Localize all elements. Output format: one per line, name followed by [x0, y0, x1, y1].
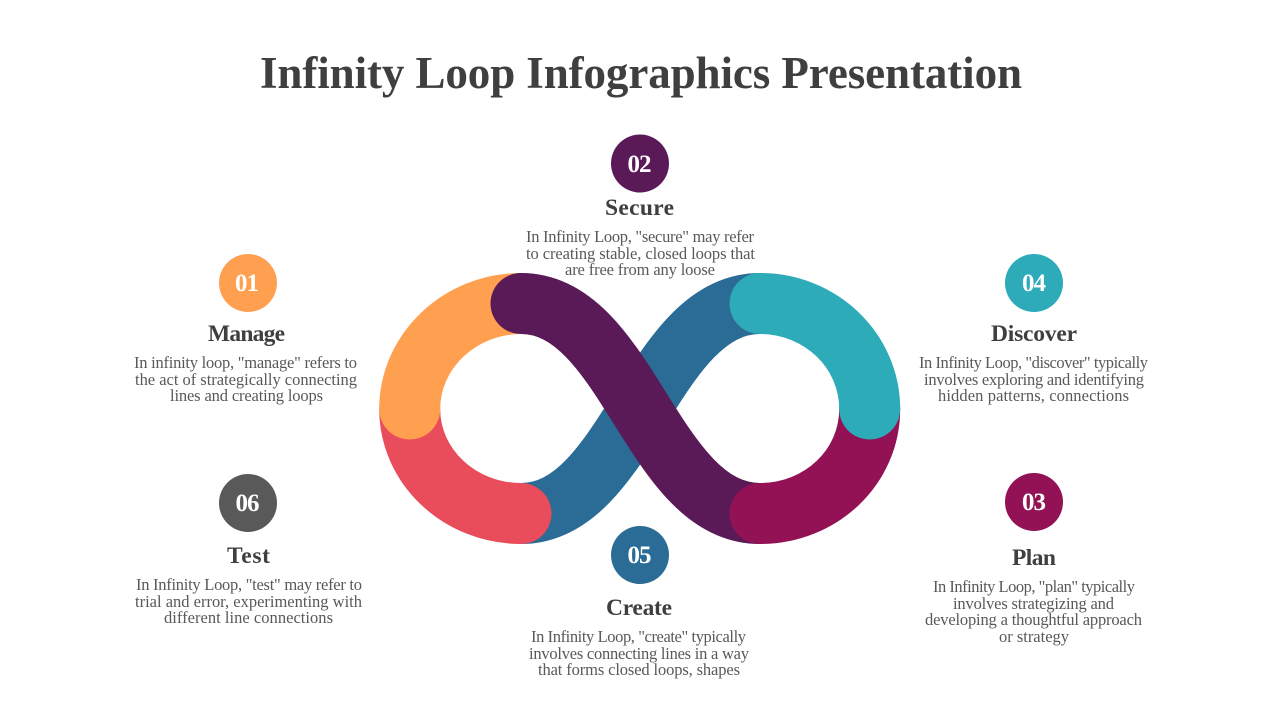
heading: test: Test [227, 543, 270, 569]
text: create description: involves connecting lines in a way [529, 644, 750, 663]
text: discover description: In Infinity Loop, "discover" typically [919, 353, 1149, 372]
text: manage description: the act of strategically connecting [135, 370, 357, 389]
title: Infinity Loop Infographics Presentation [260, 48, 1022, 98]
text: plan description: involves strategizing and [953, 594, 1115, 613]
text: manage description: lines and creating loops [170, 386, 323, 405]
text: create description [529, 627, 750, 679]
badge 06: 06 [236, 490, 260, 517]
heading: discover: Discover [991, 321, 1077, 347]
text: manage description: In infinity loop, "manage" refers to [134, 353, 357, 372]
text: test description [135, 575, 363, 627]
segment: blue create band [521, 304, 760, 514]
text: test description: In Infinity Loop, "test" may refer to [136, 575, 362, 594]
text: secure description [526, 227, 755, 279]
segment: red test arc [410, 409, 521, 514]
heading: manage: Manage [208, 321, 285, 347]
text: secure description: are free from any loose [565, 260, 715, 279]
heading: plan: Plan [1012, 545, 1056, 571]
badge 01 [219, 254, 277, 312]
badge 05 [611, 526, 669, 584]
badge 01: 01 [235, 270, 259, 297]
text: discover description: involves exploring and identifying [924, 370, 1144, 389]
panel: 06 test [135, 474, 363, 627]
badge 03 [1005, 473, 1063, 531]
segment: maroon plan arc [760, 409, 870, 514]
badge 02: 02 [628, 151, 652, 178]
segment: teal discover arc [760, 304, 870, 409]
badge 06 [219, 474, 277, 532]
panel: 05 create [529, 526, 750, 679]
badge 02 [611, 134, 669, 192]
panel: 01 manage [134, 254, 357, 405]
panel: 03 plan [925, 473, 1143, 646]
panel: 02 secure [526, 134, 755, 279]
text: discover description [919, 353, 1149, 405]
text: create description: that forms closed loops, shapes [538, 660, 740, 679]
text: plan description [925, 577, 1143, 646]
badge 05: 05 [628, 542, 652, 569]
text: manage description [134, 353, 357, 405]
text: test description: trial and error, experimenting with [135, 592, 363, 611]
text: plan description: developing a thoughtful approach [925, 610, 1143, 629]
text: secure description: In Infinity Loop, "secure" may refer [526, 227, 754, 246]
segment: purple secure band [521, 304, 760, 514]
text: discover description: hidden patterns, connections [938, 386, 1129, 405]
text: secure description: to creating stable, closed loops that [526, 244, 755, 263]
segment: orange manage arc [410, 304, 521, 409]
infinity loop chart [410, 304, 870, 514]
text: create description: In Infinity Loop, "create" typically [531, 627, 747, 646]
text: plan description: In Infinity Loop, "plan" typically [933, 577, 1136, 596]
heading: secure: Secure [605, 195, 674, 221]
badge 04: 04 [1022, 270, 1046, 297]
badge 04 [1005, 254, 1063, 312]
badge 03: 03 [1022, 489, 1046, 516]
panel: 04 discover [919, 254, 1149, 405]
heading: create: Create [606, 595, 672, 621]
text: plan description: or strategy [999, 627, 1070, 646]
text: test description: different line connections [164, 608, 333, 627]
